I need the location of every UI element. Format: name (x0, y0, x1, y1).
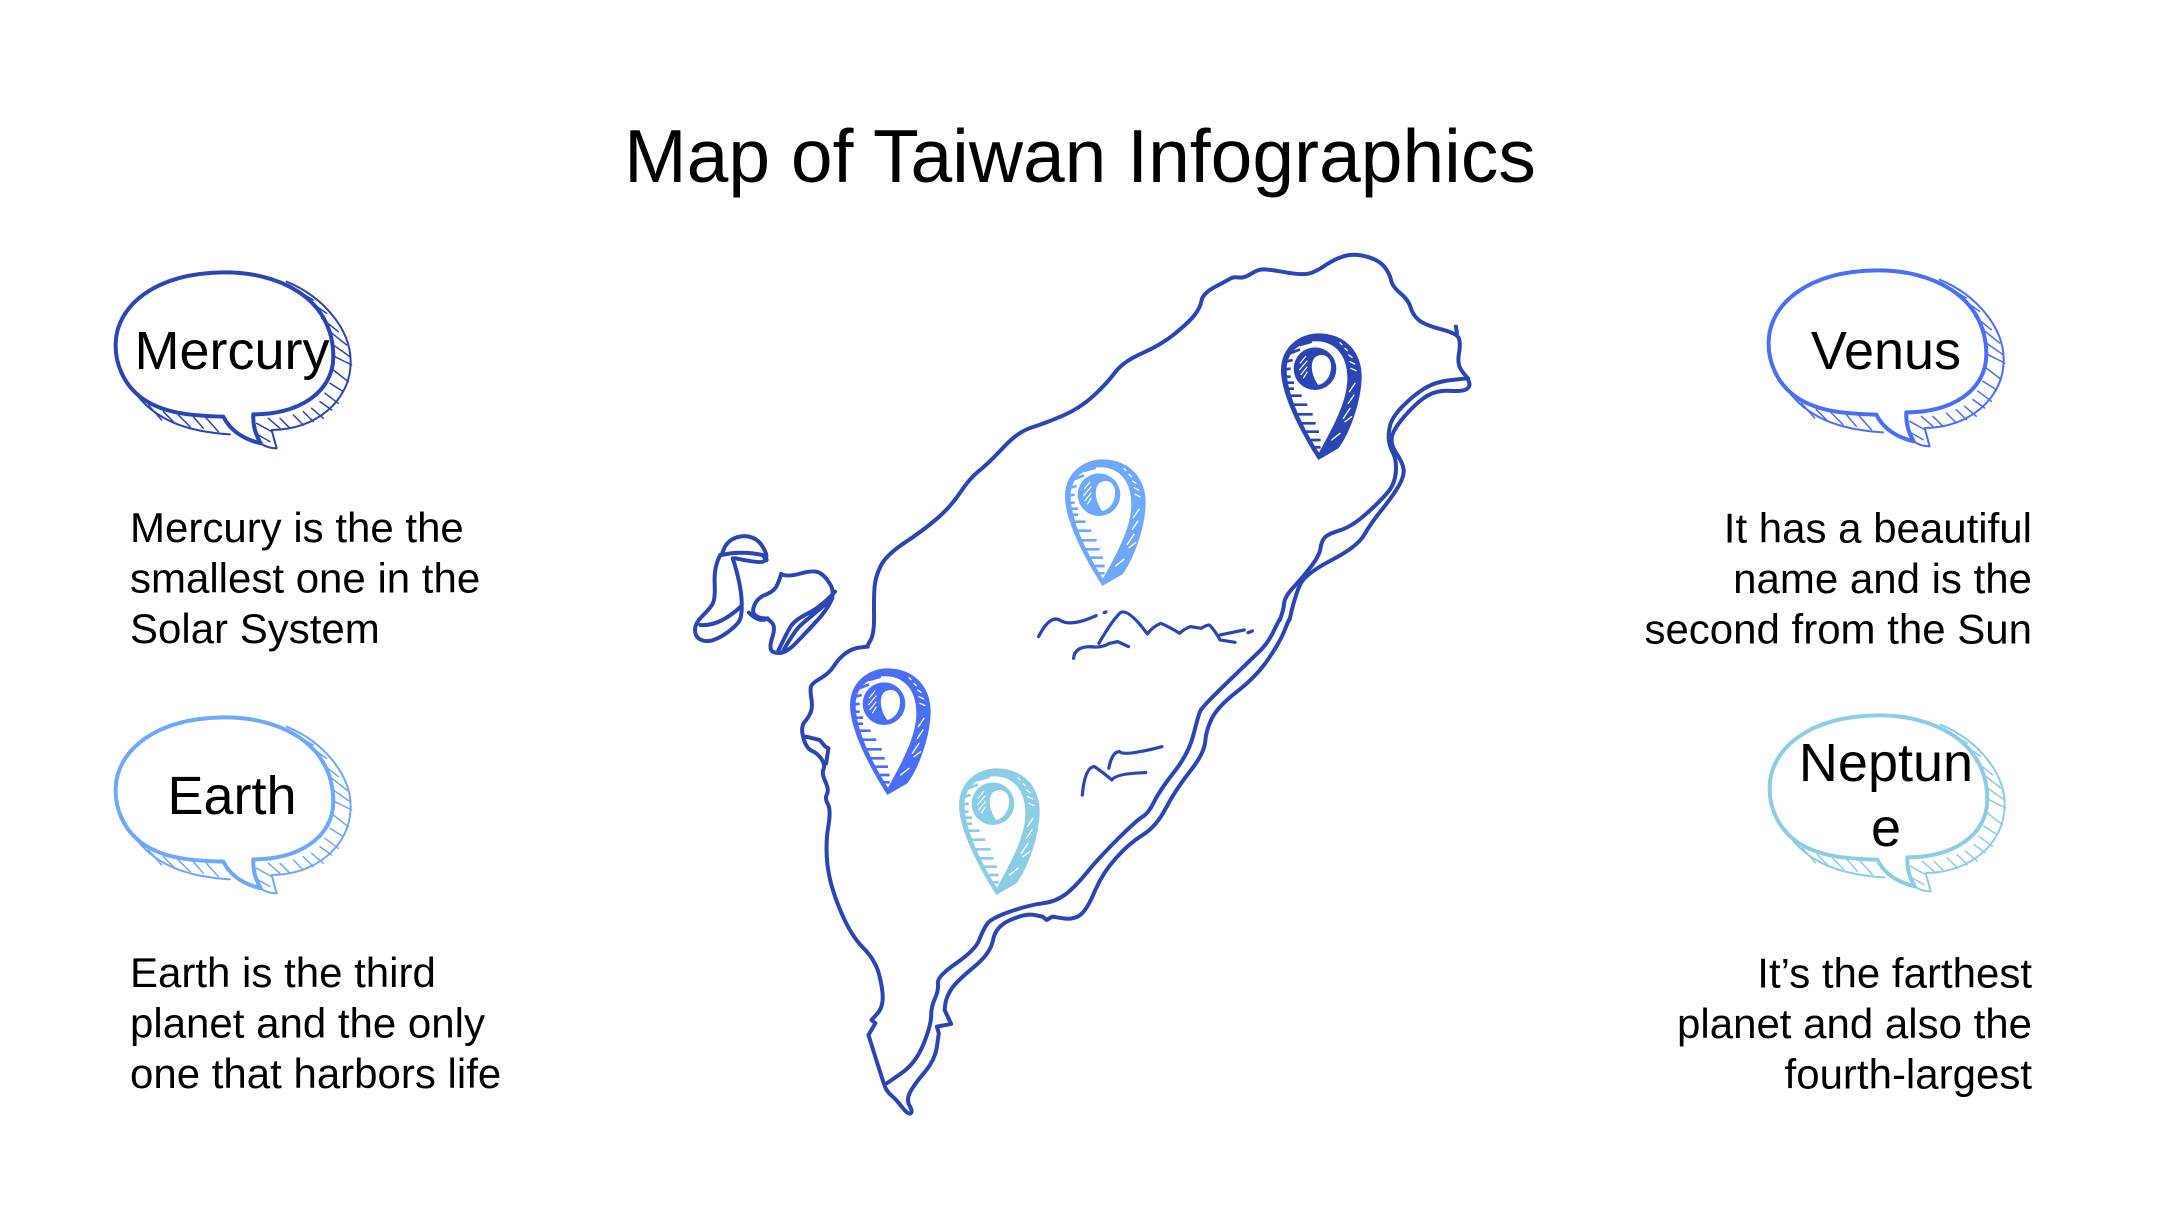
Mercury description: Solar System (130, 605, 380, 652)
icon: Mercury speech bubble (116, 272, 352, 448)
map pin: bright blue (850, 668, 931, 795)
Earth description: planet and the only (130, 1000, 485, 1046)
title: Map of Taiwan Infographics (624, 114, 1536, 198)
Neptune label: Neptun (1799, 733, 1973, 793)
Mercury description: Mercury is the the (130, 504, 464, 551)
Neptune description: fourth-largest (1785, 1050, 2032, 1098)
Venus label: Venus (1811, 321, 1961, 381)
Venus description: second from the Sun (1644, 606, 2032, 652)
Mercury label: Mercury (134, 321, 330, 381)
map pin: teal (959, 768, 1040, 895)
panel: Mercury (116, 272, 480, 652)
Neptune description: It’s the farthest (1757, 950, 2032, 996)
Earth description: one that harbors life (130, 1050, 501, 1097)
Earth label: Earth (167, 766, 297, 826)
Venus description: name and is the (1733, 555, 2032, 602)
panel: Neptune (1677, 715, 2032, 1098)
icon: Venus speech bubble (1769, 270, 2005, 446)
mountain sketches south (1082, 747, 1162, 795)
Mercury description: smallest one in the (130, 554, 480, 602)
icon: Neptune speech bubble (1770, 715, 2006, 891)
panel: Earth (116, 717, 501, 1097)
mountain sketches north (1039, 612, 1252, 658)
map pin: dark blue (1281, 333, 1362, 460)
Earth description: Earth is the third (130, 949, 436, 996)
islands (695, 536, 835, 653)
icon: Earth speech bubble (116, 717, 352, 893)
southern coastline (802, 620, 1289, 1114)
Neptune label: e (1871, 798, 1901, 858)
map pin: light blue (1065, 459, 1146, 586)
panel: Venus (1644, 270, 2032, 652)
Venus description: It has a beautiful (1724, 504, 2032, 552)
Neptune description: planet and also the (1677, 1000, 2032, 1047)
map of Taiwan (695, 255, 1469, 1114)
northern coastline (867, 255, 1469, 646)
